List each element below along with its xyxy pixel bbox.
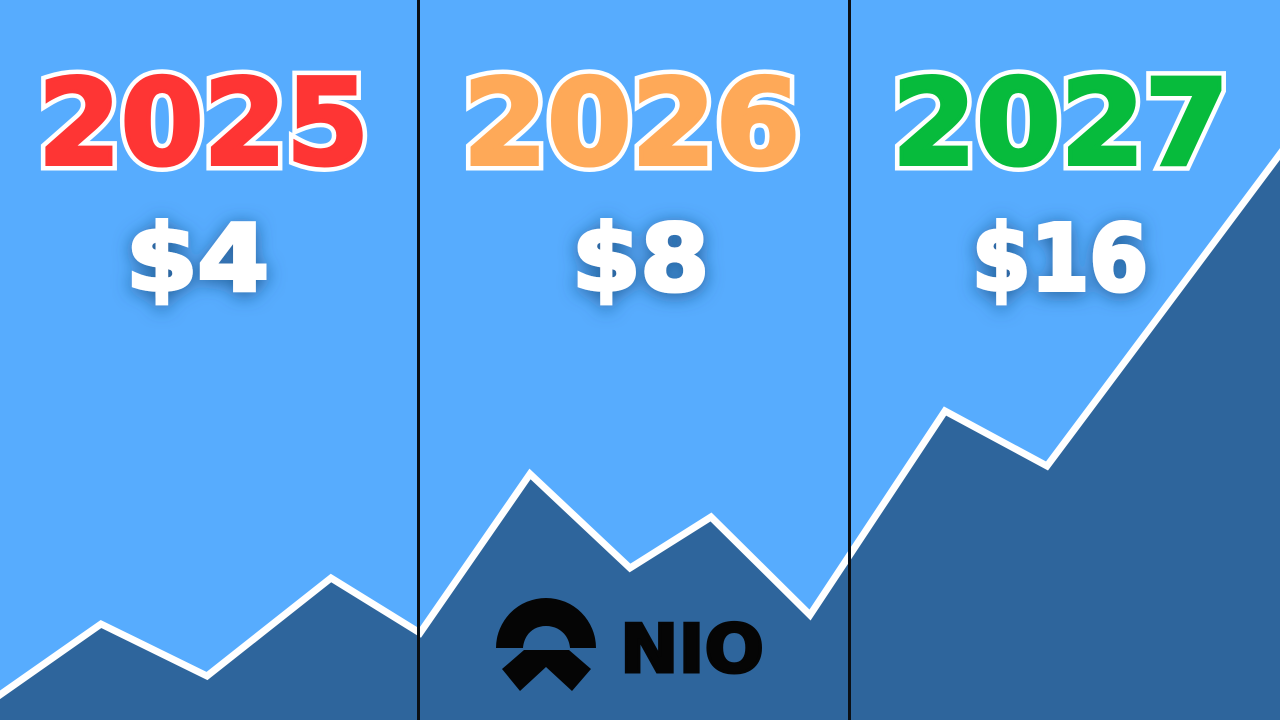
heading: 2026: 2026 <box>463 55 800 193</box>
heading: 2026: 2026 <box>463 55 800 193</box>
chart trend line <box>0 146 1280 699</box>
value: $8: $8 <box>572 205 709 312</box>
heading: 2027: 2027 <box>892 55 1229 193</box>
wordmark: NIO: NIO <box>620 610 764 688</box>
chart area fill <box>0 154 1280 720</box>
column divider left <box>417 0 420 720</box>
heading: 2025: 2025 <box>38 55 369 193</box>
value: $16: $16 <box>972 205 1148 312</box>
value: $4: $4 <box>126 205 269 312</box>
heading: 2027: 2027 <box>892 55 1229 193</box>
icon: NIO arch and chevron <box>496 598 596 691</box>
area chart <box>0 146 1280 720</box>
NIO logo <box>496 598 764 691</box>
column divider right <box>848 0 851 720</box>
heading: 2025: 2025 <box>38 55 369 193</box>
